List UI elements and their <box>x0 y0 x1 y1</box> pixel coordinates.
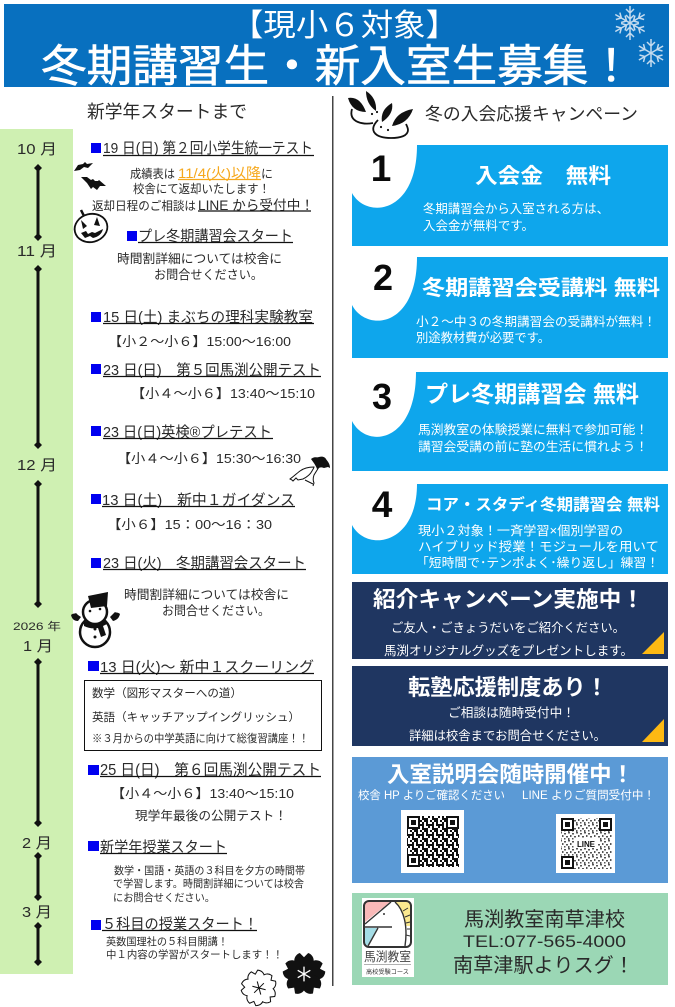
number 4: 4 <box>372 484 393 525</box>
item: junior high guidance: 13 日(土) 新中１ガイダンス <box>102 492 295 509</box>
header target line: 【現小６対象】 <box>231 8 458 43</box>
item: 10/19 test: に <box>261 167 273 181</box>
QR code: LINE <box>556 814 615 873</box>
icon: black sakura <box>281 953 327 997</box>
QR code: website <box>401 810 464 873</box>
schedule list <box>84 140 322 961</box>
panel: referral campaign <box>352 582 668 659</box>
item: pre winter course <box>117 228 293 282</box>
number 2: 2 <box>373 257 393 298</box>
timeline column <box>0 129 73 974</box>
month labels: 2026 年 <box>13 619 61 633</box>
item: new grade classes: にお問合せください。 <box>113 891 215 904</box>
campaign 1 text: 冬期講習会から入室される方は、 <box>423 201 609 216</box>
header banner <box>4 4 669 91</box>
logo: Mabuchi classroom: 馬渕教室 <box>364 949 411 964</box>
item: five subjects: ５科目の授業スタート！ <box>102 916 258 933</box>
timeline connectors <box>34 164 42 966</box>
panel: campaign 1: 入会金が無料です。 <box>423 218 534 233</box>
icon: corner triangle <box>642 719 664 742</box>
month labels: 11 月 <box>17 243 57 260</box>
referral title: 紹介キャンペーン実施中！ <box>373 587 644 612</box>
item: 10/19 test: 返却日程のご相談は <box>92 198 196 213</box>
item: open test 6: 【小４～小６】13:40～15:10 <box>111 786 294 801</box>
month labels: 2 月 <box>22 835 52 852</box>
panel: campaign 2: 別途教材費が必要です。 <box>416 330 550 345</box>
transfer text: ご相談は随時受付中！ <box>448 705 575 720</box>
item: pre winter course: 時間割詳細については校舎に <box>117 251 282 266</box>
panel: campaign 4: ハイブリッド授業！モジュールを用いて <box>418 539 659 554</box>
campaign 2 title: 冬期講習会受講料 無料 <box>422 277 660 300</box>
campaign 4 text: 現小２対象！一斉学習×個別学習の <box>418 523 623 538</box>
item: 10/19 test: 成績表は <box>130 166 175 181</box>
panel: campaign 3: 講習会受講の前に塾の生活に慣れよう！ <box>418 439 648 454</box>
icon: corner triangle <box>642 632 664 654</box>
panel: information session <box>352 757 668 883</box>
school name: 馬渕教室南草津校 <box>464 908 625 931</box>
campaign 4 title: コア・スタディ冬期講習会 無料 <box>426 495 660 514</box>
campaign 3 text: 馬渕教室の体験授業に無料で参加可能！ <box>418 422 648 437</box>
item: junior high guidance <box>91 492 295 532</box>
panel: transfer support: 詳細は校舎までお問合せください。 <box>409 728 606 743</box>
item: open test 6: 25 日(日) 第６回馬渕公開テスト <box>100 761 321 779</box>
item: five subjects: 英数国理社の５科目開講！ <box>106 935 228 948</box>
left column heading: 新学年スタートまで <box>87 102 247 122</box>
month labels: 1 月 <box>23 638 53 655</box>
item: schooling: 13 日(火)～ 新中１スクーリング <box>100 659 314 676</box>
item: new grade classes <box>88 839 305 904</box>
icon: large snowflake <box>613 6 647 40</box>
number 1: 1 <box>371 148 391 189</box>
panel: campaign 4 <box>352 484 668 574</box>
logo: Mabuchi classroom: 高校受験コース <box>366 968 409 976</box>
transfer title: 転塾応援制度あり！ <box>408 675 608 700</box>
item: science class <box>91 309 314 349</box>
right column heading: 冬の入会応援キャンペーン <box>425 104 638 124</box>
item: 10/19 test: LINE から受付中！ <box>198 198 314 213</box>
campaign 1 title: 入会金 無料 <box>475 165 611 188</box>
logo: Mabuchi classroom <box>362 898 414 977</box>
number 3: 3 <box>372 376 392 417</box>
item: eiken pretest: 【小４～小６】15:30～16:30 <box>117 451 301 466</box>
icon: pumpkin <box>72 210 110 246</box>
session title: 入室説明会随時開催中！ <box>387 762 634 787</box>
item: new grade classes: 数学・国語・英語の３科目を夕方の時間帯 <box>114 864 305 877</box>
month labels: 12 月 <box>17 457 57 474</box>
item: science class: 【小２～小６】15:00～16:00 <box>108 334 291 349</box>
panel: campaign 1 <box>352 145 668 246</box>
item: open test 5: 23 日(日) 第５回馬渕公開テスト <box>103 362 321 379</box>
icon: outlined sakura <box>237 967 282 1007</box>
panel: campaign 2 <box>352 257 668 358</box>
panel: information session: LINE よりご質問受付中！ <box>522 788 655 802</box>
item: pre winter course: プレ冬期講習会スタート <box>138 228 293 245</box>
item: 10/19 test <box>91 140 314 213</box>
icon: small snowflake <box>637 39 665 67</box>
item: five subjects <box>91 916 283 961</box>
item: eiken pretest: 23 日(日)英検®プレテスト <box>103 423 272 441</box>
session captions: 校舎 HP よりご確認ください <box>358 788 505 802</box>
schooling detail box <box>84 680 322 750</box>
panel: campaign 4: 「短時間で･テンポよく･繰り返し」練習！ <box>416 556 659 570</box>
column divider <box>332 96 334 986</box>
icon: snowman <box>71 592 120 647</box>
item: winter course start: 23 日(火) 冬期講習会スタート <box>103 555 306 572</box>
main title: 冬期講習生・新入室生募集！ <box>41 42 634 91</box>
icon: ginkgo leaves <box>290 457 330 486</box>
access note: 南草津駅よりスグ！ <box>453 954 634 977</box>
item: open test 5 <box>91 362 321 401</box>
item: five subjects: 中１内容の学習がスタートします！！ <box>106 948 283 961</box>
month labels: 10 月 <box>17 141 57 158</box>
item: new grade classes: 新学年授業スタート <box>100 839 227 856</box>
panel: school contact <box>352 893 668 985</box>
item: new grade classes: で学習します。時間割詳細については校舎 <box>113 877 304 890</box>
item: pre winter course: お問合せください。 <box>154 268 263 282</box>
item: open test 6: 現学年最後の公開テスト！ <box>135 808 287 823</box>
item: open test 5: 【小４～小６】13:40～15:10 <box>131 386 315 401</box>
item: 10/19 test: 19 日(日) 第２回小学生統一テスト <box>103 140 313 157</box>
icon: bats <box>74 162 106 190</box>
item: junior high guidance: 【小６】15：00～16：30 <box>107 517 272 532</box>
schooling detail box: 数学（図形マスターへの道） <box>92 686 242 700</box>
item: eiken pretest <box>91 423 301 466</box>
campaign 2 text: 小２～中３の冬期講習会の受講料が無料！ <box>416 314 656 329</box>
phone number: TEL:077-565-4000 <box>463 932 626 951</box>
item: open test 6 <box>88 761 321 823</box>
icon: snow rabbits <box>348 91 413 138</box>
item: winter course start: お問合せください。 <box>162 604 270 618</box>
campaign 3 title: プレ冬期講習会 無料 <box>425 381 639 407</box>
item: winter course start <box>91 555 306 618</box>
item: schooling <box>84 659 322 750</box>
panel: referral campaign: 馬渕オリジナルグッズをプレゼントします。 <box>384 643 633 658</box>
panel: transfer support <box>352 666 668 746</box>
item: science class: 15 日(土) まぶちの理科実験教室 <box>103 309 313 326</box>
item: 10/19 test: 校舎にて返却いたします！ <box>133 182 270 196</box>
schooling detail box: ※３月からの中学英語に向けて総復習講座！！ <box>92 731 309 745</box>
QR code: LINE: LINE <box>577 840 596 849</box>
schooling detail box: 英語（キャッチアップイングリッシュ） <box>92 710 300 724</box>
item: winter course start: 時間割詳細については校舎に <box>124 587 289 602</box>
panel: campaign 3 <box>352 372 668 471</box>
month labels: 3 月 <box>22 904 52 921</box>
month labels <box>13 141 61 921</box>
item: 10/19 test: 11/4(火)以降 <box>178 165 261 181</box>
referral text: ご友人・ごきょうだいをご紹介ください。 <box>391 620 625 635</box>
